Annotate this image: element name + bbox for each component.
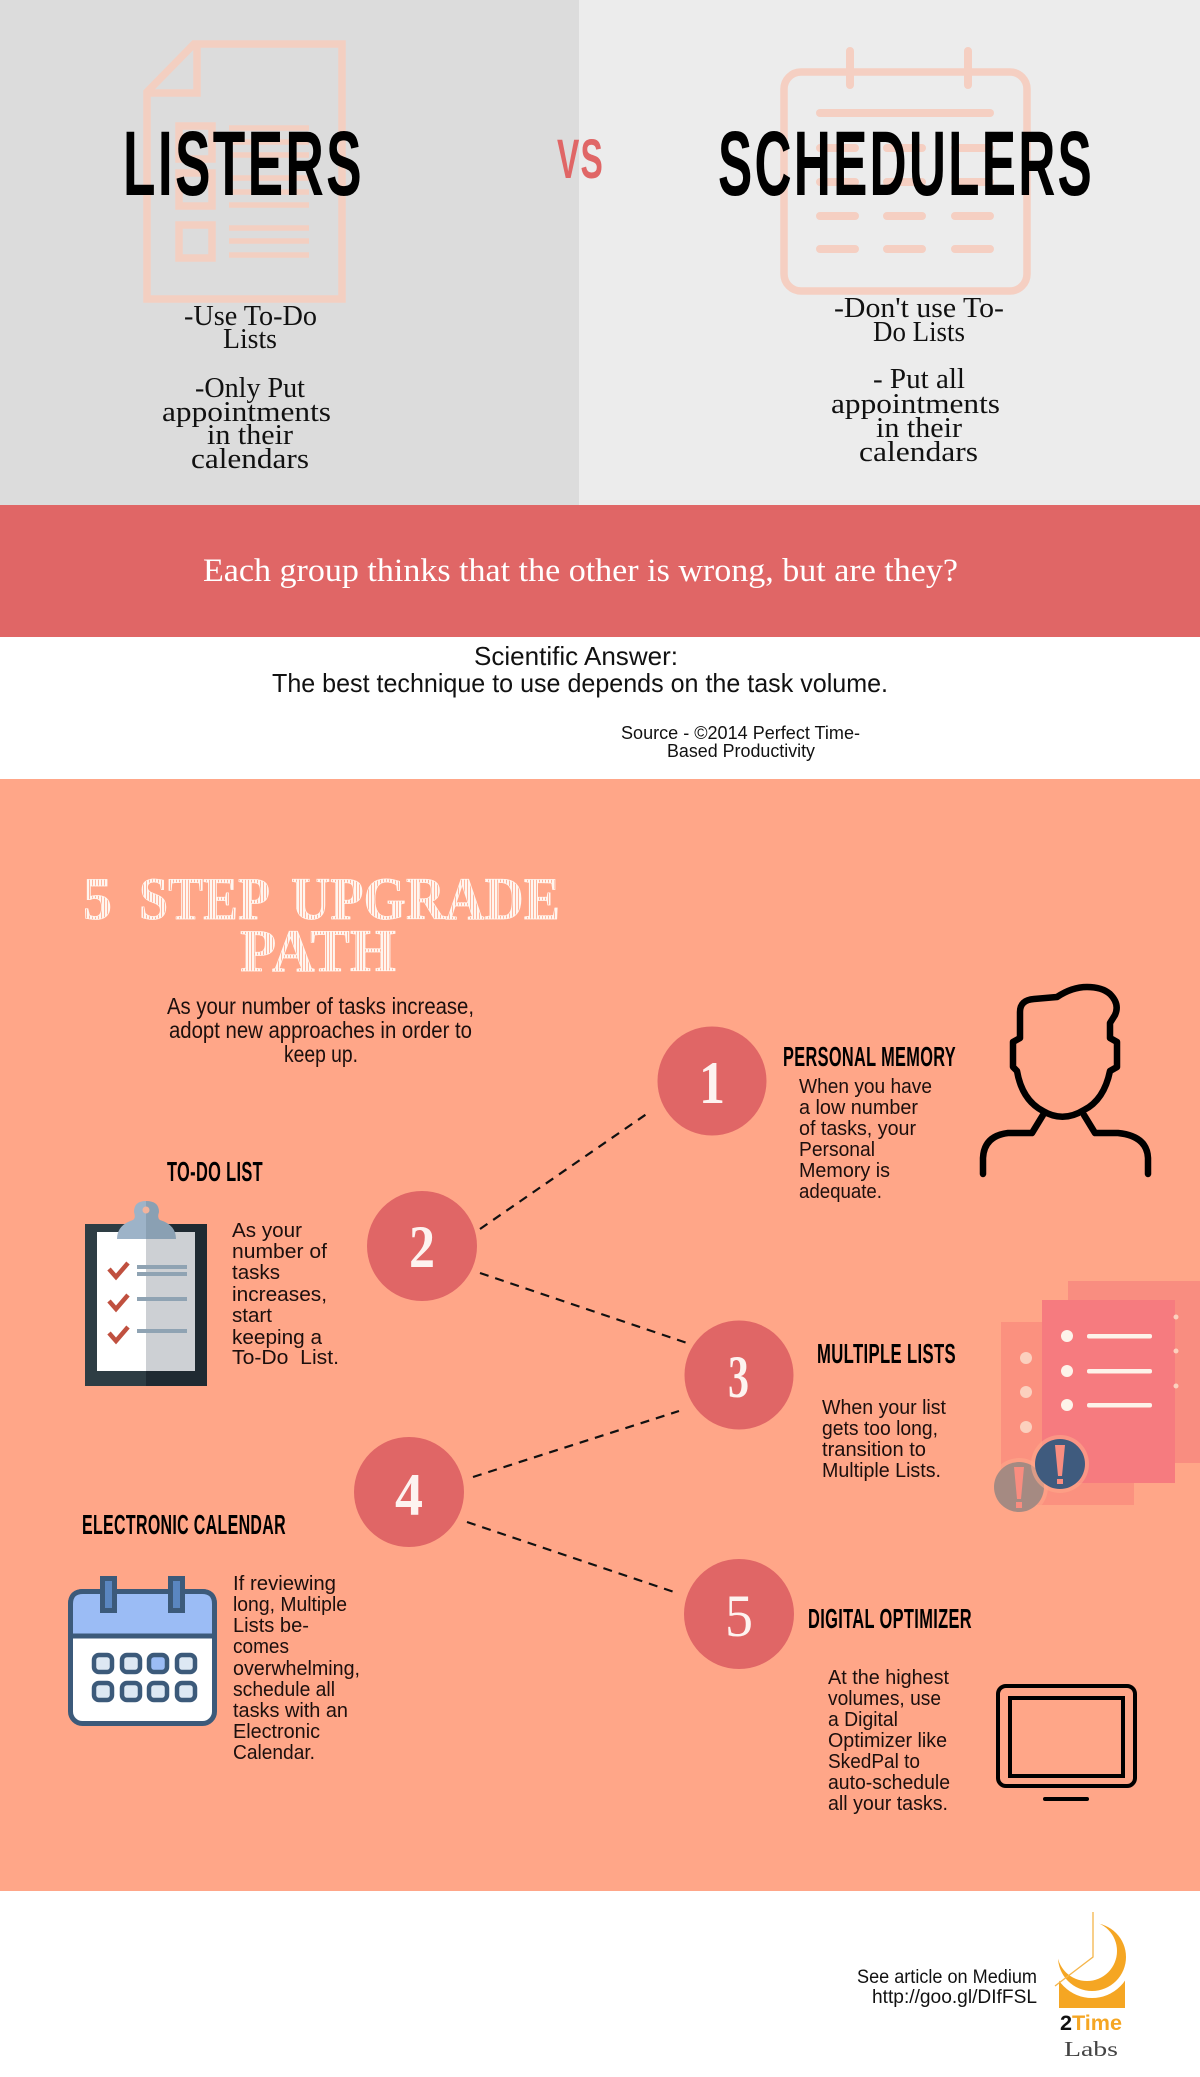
text: schedulers description: Do Lists xyxy=(873,317,965,348)
text: intro xyxy=(167,993,474,1067)
logo: 2Time Labs xyxy=(1052,1912,1132,2061)
text: intro: As your number of tasks increase, xyxy=(167,993,474,1019)
step 1: 1 xyxy=(699,1050,725,1116)
text: source: Based Productivity xyxy=(667,741,815,761)
heading: personal memory: PERSONAL MEMORY xyxy=(783,1041,956,1072)
text: digital optimizer description: auto-schedule xyxy=(828,1772,950,1794)
text: to-do list description: keeping a xyxy=(232,1327,323,1349)
text: electronic calendar description: tasks with an xyxy=(233,1700,348,1722)
text: medium article link: See article on Medium xyxy=(857,1967,1037,1988)
icon: document watermark xyxy=(147,44,342,299)
icon: monitor xyxy=(998,1686,1135,1799)
step 5: 5 xyxy=(725,1583,753,1649)
text: schedulers description: appointments xyxy=(831,389,1000,420)
icon: calendar watermark xyxy=(784,51,1027,291)
text: schedulers description: - Put all xyxy=(873,364,965,395)
step 3: 3 xyxy=(728,1344,749,1410)
text: listers description: -Use To-Do xyxy=(184,301,317,332)
text: listers description: appointments xyxy=(162,397,331,428)
text: personal memory description xyxy=(799,1076,932,1203)
text: personal memory description: a low number xyxy=(799,1097,918,1119)
heading: 5 step upgrade path xyxy=(83,866,560,984)
text: intro: keep up. xyxy=(284,1041,358,1067)
text: electronic calendar description: long, Multiple xyxy=(233,1594,347,1616)
icon: person outline xyxy=(983,987,1148,1174)
heading: multiple lists: MULTIPLE LISTS xyxy=(817,1338,956,1369)
heading: 5 step upgrade path: 5 xyxy=(83,866,112,932)
text: medium article link: http://goo.gl/DIfFSL xyxy=(872,1987,1037,2008)
text: multiple lists description: gets too long, xyxy=(822,1418,938,1440)
icon: clipboard xyxy=(85,1201,207,1386)
text: listers description: -Only Put xyxy=(195,373,305,404)
text: multiple lists description: Multiple Lists. xyxy=(822,1460,941,1482)
logo: 2Time Labs: Labs xyxy=(1064,2037,1118,2061)
heading: digital optimizer: DIGITAL OPTIMIZER xyxy=(808,1603,972,1634)
text: banner question: Each group thinks that the other is wrong, but are they? xyxy=(203,553,958,589)
text: schedulers description xyxy=(831,293,1004,468)
heading: listers: LISTERS xyxy=(123,113,364,215)
text: electronic calendar description: overwhelming, xyxy=(233,1658,360,1680)
text: electronic calendar description: Lists be- xyxy=(233,1615,309,1637)
text: to-do list description: number of xyxy=(232,1241,327,1263)
text: digital optimizer description: At the highest xyxy=(828,1667,949,1689)
text: medium article link xyxy=(857,1967,1037,2008)
heading: electronic calendar: ELECTRONIC CALENDAR xyxy=(82,1509,286,1540)
text: digital optimizer description: a Digital xyxy=(828,1709,898,1731)
heading: vs: VS xyxy=(557,127,604,190)
text: electronic calendar description xyxy=(233,1573,360,1764)
step 2: 2 xyxy=(409,1214,435,1280)
text: scientific answer xyxy=(272,641,888,698)
panel: schedulers xyxy=(579,0,1200,505)
icon: calendar xyxy=(70,1578,214,1724)
text: listers description: calendars xyxy=(191,444,309,475)
text: electronic calendar description: If reviewing xyxy=(233,1573,336,1595)
panel: question banner xyxy=(0,505,1200,637)
icon: stacked lists with alerts xyxy=(990,1281,1200,1516)
text: multiple lists description: When your list xyxy=(822,1397,946,1419)
text: personal memory description: adequate. xyxy=(799,1181,882,1203)
text: schedulers description: calendars xyxy=(859,437,978,468)
text: digital optimizer description: volumes, use xyxy=(828,1688,941,1710)
text: scientific answer: Scientific Answer: xyxy=(474,641,678,671)
text: digital optimizer description xyxy=(828,1667,950,1815)
text: to-do list description: start xyxy=(232,1305,272,1327)
step 3 xyxy=(684,1281,1200,1516)
text: schedulers description: -Don't use To- xyxy=(834,293,1004,324)
text: electronic calendar description: comes xyxy=(233,1636,289,1658)
heading: 5 step upgrade path: UPGRADE xyxy=(291,866,560,932)
text: personal memory description: When you have xyxy=(799,1076,932,1098)
heading: 5 step upgrade path: STEP xyxy=(139,866,270,932)
text: to-do list description: As your xyxy=(232,1220,302,1242)
text: to-do list description: increases, xyxy=(232,1284,327,1306)
text: source xyxy=(621,723,860,761)
step 2 xyxy=(85,1156,477,1386)
text: to-do list description xyxy=(232,1220,339,1369)
text: listers description: Lists xyxy=(223,324,277,355)
text: multiple lists description: transition to xyxy=(822,1439,926,1461)
step 4 xyxy=(70,1437,464,1764)
text: listers description: in their xyxy=(207,420,294,451)
text: multiple lists description xyxy=(822,1397,946,1482)
text: digital optimizer description: all your tasks. xyxy=(828,1793,948,1815)
text: personal memory description: of tasks, your xyxy=(799,1118,916,1140)
text: digital optimizer description: SkedPal to xyxy=(828,1751,920,1773)
text: digital optimizer description: Optimizer like xyxy=(828,1730,947,1752)
text: personal memory description: Personal xyxy=(799,1139,875,1161)
text: scientific answer: The best technique to use depends on the task volume. xyxy=(272,668,888,698)
heading: to-do list: TO-DO LIST xyxy=(167,1156,263,1187)
text: to-do list description: To-Do List. xyxy=(232,1347,339,1369)
logo: 2Time Labs: 2Time xyxy=(1060,2012,1122,2035)
text: personal memory description: Memory is xyxy=(799,1160,890,1182)
panel: listers xyxy=(0,0,579,505)
text: intro: adopt new approaches in order to xyxy=(169,1017,472,1043)
text: electronic calendar description: Calendar. xyxy=(233,1742,315,1764)
step 5 xyxy=(684,1559,1135,1815)
step 1 xyxy=(658,987,1148,1203)
text: to-do list description: tasks xyxy=(232,1262,280,1284)
step 4: 4 xyxy=(395,1462,423,1528)
panel: upgrade path xyxy=(0,779,1200,1891)
text: source: Source - ©2014 Perfect Time- xyxy=(621,723,860,743)
text: schedulers description: in their xyxy=(876,413,963,444)
text: listers description xyxy=(162,301,331,475)
heading: 5 step upgrade path: PATH xyxy=(240,918,396,984)
text: electronic calendar description: Electronic xyxy=(233,1721,320,1743)
text: electronic calendar description: schedule all xyxy=(233,1679,335,1701)
dashed connectors xyxy=(467,1113,687,1592)
